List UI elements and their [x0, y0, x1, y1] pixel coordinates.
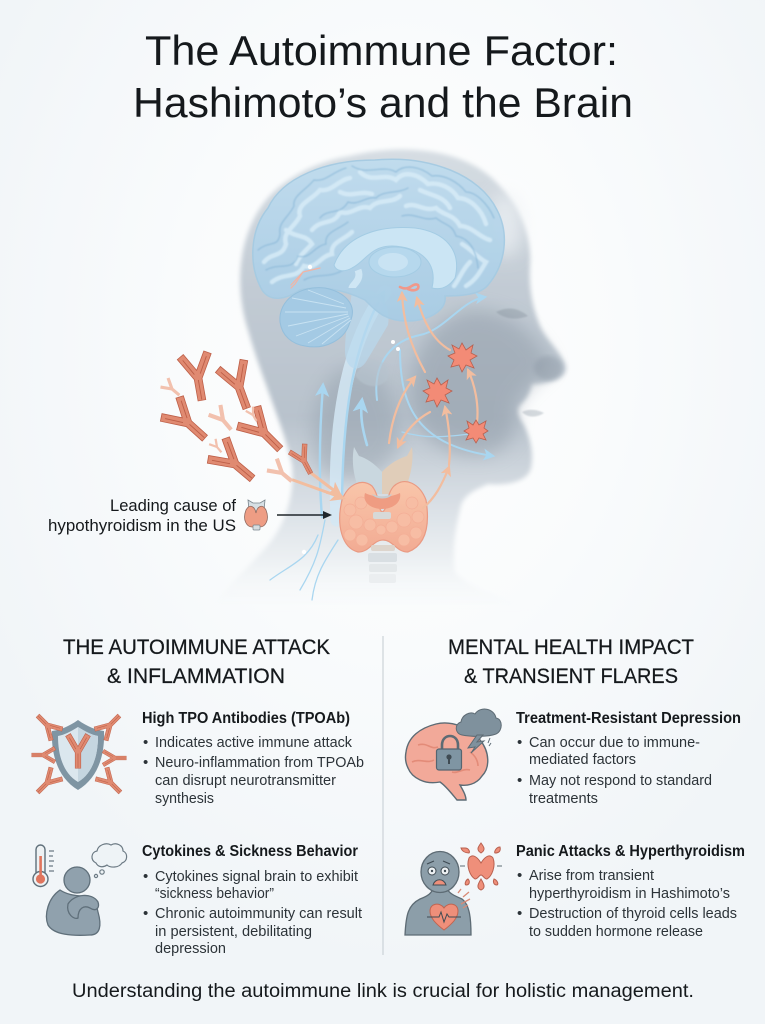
text: treatment-resistant depression: mediated factors	[529, 751, 636, 768]
text: treatment-resistant depression: treatments	[529, 790, 598, 807]
text: high TPO antibodies: •	[143, 734, 148, 751]
text: cytokines and sickness behavior: •	[143, 868, 148, 885]
footer takeaway: Understanding the autoimmune link is crucial for holistic management.	[72, 981, 694, 1002]
text: treatment-resistant depression: •	[517, 772, 522, 789]
brainstem	[345, 289, 389, 368]
icon: panicked person with thyroid and heart	[405, 843, 502, 935]
text: treatment-resistant depression: Treatment-Resistant Depression	[516, 710, 741, 727]
larynx cartilage	[353, 447, 413, 494]
text: cytokines and sickness behavior: “sickness behavior”	[155, 885, 274, 902]
heading: THE AUTOIMMUNE ATTACK	[63, 635, 331, 659]
text: panic attacks and hyperthyroidism: Panic Attacks & Hyperthyroidism	[516, 843, 745, 860]
text: high TPO antibodies: can disrupt neurotransmitter	[155, 772, 336, 789]
thermometer	[33, 845, 54, 886]
text: treatment-resistant depression: Can occur due to immune-	[529, 734, 700, 751]
arrow to thyroid	[277, 511, 332, 519]
thyroid gland	[340, 482, 427, 552]
text: panic attacks and hyperthyroidism: hyperthyroidism in Hashimoto’s	[529, 885, 730, 902]
text: cytokines and sickness behavior: •	[143, 905, 148, 922]
text: treatment-resistant depression: May not respond to standard	[529, 772, 712, 789]
text: high TPO antibodies: Neuro-inflammation from TPOAb	[155, 754, 364, 771]
title: Hashimoto’s and the Brain	[133, 79, 633, 126]
panel: mental health impact and transient flares	[405, 635, 745, 940]
text: cytokines and sickness behavior: in persistent, debilitating	[155, 923, 312, 940]
thought cloud	[92, 844, 127, 878]
inflamed brain signals	[291, 265, 418, 290]
callout: leading cause of hypothyroidism: hypothyroidism in the US	[48, 516, 236, 535]
seated figure	[46, 867, 100, 935]
central illustration: head, brain and thyroid	[205, 149, 566, 612]
text: high TPO antibodies: synthesis	[155, 790, 214, 807]
icon: sick person with thermometer	[33, 844, 127, 935]
cerebellum	[280, 288, 352, 347]
antibodies cluster	[160, 352, 318, 490]
storm cloud	[456, 709, 501, 753]
cerebrum	[253, 159, 504, 321]
heading	[63, 635, 331, 688]
heading: MENTAL HEALTH IMPACT	[448, 635, 694, 659]
text: cytokines and sickness behavior: Cytokines & Sickness Behavior	[142, 843, 358, 860]
text: panic attacks and hyperthyroidism: to sudden hormone release	[529, 923, 703, 940]
orange signal arrows	[293, 293, 478, 508]
text: high TPO antibodies: High TPO Antibodies (TPOAb)	[142, 710, 350, 727]
padlock	[436, 736, 462, 770]
text: cytokines and sickness behavior: Cytokines signal brain to exhibit	[155, 868, 359, 885]
heading: & INFLAMMATION	[107, 664, 285, 688]
brain folds	[264, 172, 490, 286]
text: high TPO antibodies	[142, 710, 364, 807]
blue nerve pathways	[270, 292, 493, 600]
heading	[448, 635, 694, 688]
flaring thyroid	[461, 843, 500, 890]
text: cytokines and sickness behavior	[142, 843, 363, 957]
text: panic attacks and hyperthyroidism: Arise from transient	[529, 867, 655, 884]
callout: leading cause of hypothyroidism	[48, 496, 332, 535]
heading: & TRANSIENT FLARES	[464, 664, 678, 688]
corpus callosum	[334, 227, 457, 289]
trachea	[368, 553, 397, 583]
face shading	[410, 310, 552, 455]
head silhouette	[205, 149, 566, 612]
heart	[430, 904, 458, 930]
text: high TPO antibodies: Indicates active immune attack	[155, 734, 352, 751]
callout: leading cause of hypothyroidism: Leading cause of	[110, 496, 236, 515]
text: treatment-resistant depression: •	[517, 734, 522, 751]
cytokine bursts	[423, 343, 488, 443]
text: cytokines and sickness behavior: depression	[155, 940, 226, 957]
icon: brain with lock and storm cloud	[405, 709, 501, 800]
text: cytokines and sickness behavior: Chronic autoimmunity can result	[155, 905, 363, 922]
brain	[253, 159, 504, 386]
icon: shield with antibodies	[32, 710, 126, 798]
text: high TPO antibodies: •	[143, 754, 148, 771]
text: treatment-resistant depression	[516, 710, 741, 807]
text: panic attacks and hyperthyroidism: Destruction of thyroid cells leads	[529, 905, 737, 922]
text: panic attacks and hyperthyroidism	[516, 843, 745, 940]
icon: small thyroid	[245, 500, 267, 530]
title	[133, 27, 633, 126]
text: panic attacks and hyperthyroidism: •	[517, 905, 522, 922]
text: panic attacks and hyperthyroidism: •	[517, 867, 522, 884]
title: The Autoimmune Factor:	[145, 27, 618, 74]
panel: the autoimmune attack and inflammation	[32, 635, 364, 957]
